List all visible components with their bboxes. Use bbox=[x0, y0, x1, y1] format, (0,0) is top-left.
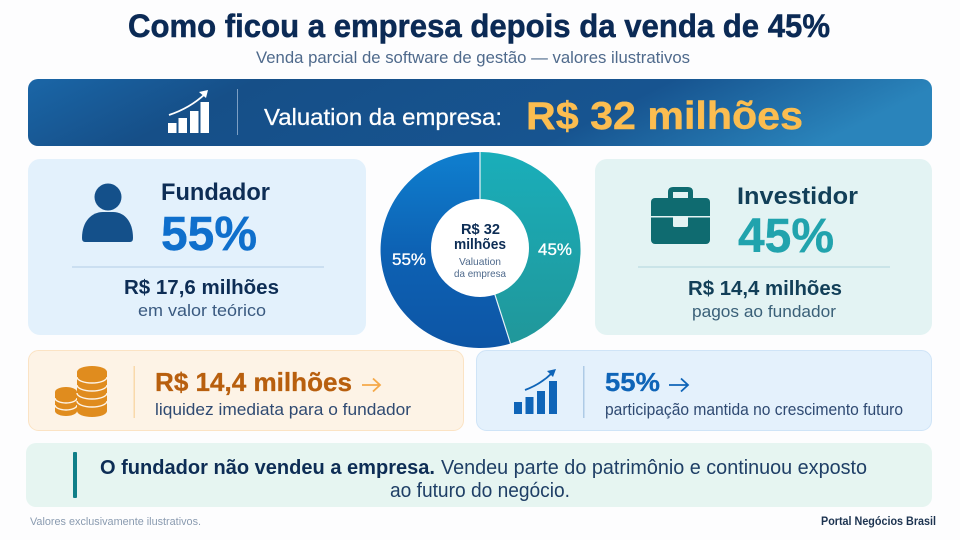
conclusão bold statement: O fundador não vendeu a empresa. bbox=[100, 457, 435, 479]
panel: conclusão bbox=[26, 443, 932, 507]
liquidez value: R$ 14,4 milhões bbox=[155, 367, 352, 397]
fundador value: R$ 17,6 milhões bbox=[124, 277, 279, 299]
icon: briefcase bbox=[651, 187, 710, 244]
arrow bbox=[362, 378, 380, 392]
panel: investidor bbox=[595, 159, 932, 335]
slice: fundador 55% bbox=[381, 152, 510, 348]
donut chart: milhões bbox=[454, 237, 506, 253]
panel: participação bbox=[476, 350, 932, 430]
panel: liquidez bbox=[28, 350, 464, 430]
donut chart: da empresa bbox=[454, 268, 506, 280]
footer brand: Portal Negócios Brasil bbox=[821, 516, 936, 528]
icon: growth chart bbox=[168, 90, 209, 133]
fundador note: em valor teórico bbox=[138, 301, 266, 320]
arrow bbox=[669, 378, 688, 392]
participação note: participação mantida no crescimento futuro bbox=[605, 401, 903, 419]
conclusão text: Vendeu parte do patrimônio e continuou exposto bbox=[441, 457, 867, 479]
panel: conclusão: ao futuro do negócio. bbox=[390, 480, 570, 502]
participação value: 55% bbox=[605, 367, 660, 397]
valuation label: Valuation da empresa: bbox=[264, 104, 502, 130]
investidor note: pagos ao fundador bbox=[692, 302, 836, 321]
icon: person bbox=[82, 184, 133, 242]
slice label 45%: 45% bbox=[538, 241, 572, 259]
icon: growth chart bbox=[514, 369, 557, 414]
title: Como ficou a empresa depois da venda de 45% bbox=[128, 8, 830, 44]
slice label 55%: 55% bbox=[392, 251, 426, 269]
footer note: Valores exclusivamente ilustrativos. bbox=[30, 516, 201, 528]
investidor value: R$ 14,4 milhões bbox=[688, 278, 842, 300]
liquidez note: liquidez imediata para o fundador bbox=[155, 400, 411, 419]
slice: investidor 45% bbox=[480, 152, 581, 344]
panel: valuation banner bbox=[28, 79, 932, 146]
panel: fundador bbox=[28, 159, 366, 335]
fundador share: 55% bbox=[161, 208, 257, 261]
investidor label: Investidor bbox=[737, 183, 858, 210]
donut centre value: R$ 32 bbox=[461, 222, 500, 238]
fundador label: Fundador bbox=[161, 179, 270, 206]
valuation value: R$ 32 milhões bbox=[526, 95, 803, 138]
investidor share: 45% bbox=[738, 210, 834, 263]
donut centre note: Valuation bbox=[459, 256, 501, 268]
donut chart bbox=[381, 152, 581, 348]
subtitle: Venda parcial de software de gestão — valores ilustrativos bbox=[256, 49, 690, 67]
icon: coins bbox=[55, 366, 107, 417]
